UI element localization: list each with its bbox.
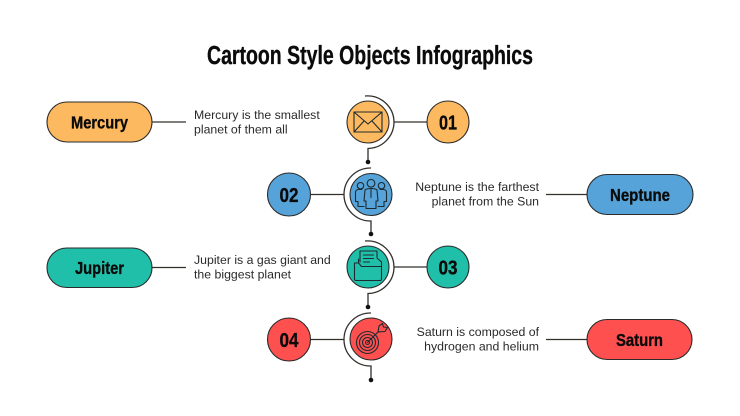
pill: Neptune: Neptune: [610, 185, 670, 205]
text: Jupiter description: the biggest planet: [194, 268, 292, 282]
number 03: [427, 246, 469, 288]
connector arc with dot: [365, 96, 394, 164]
pill: Jupiter: Jupiter: [75, 258, 124, 278]
pill: Mercury: [47, 102, 152, 142]
pill: Saturn: Saturn: [616, 330, 663, 350]
pill: Jupiter: [47, 248, 152, 288]
row 4: Saturn: [268, 313, 692, 382]
text: Mercury description: planet of them all: [194, 122, 288, 136]
icon: people: [350, 174, 392, 216]
text: Neptune description: Neptune is the farthest: [415, 180, 540, 194]
number 02: 02: [280, 184, 298, 207]
icon: envelope: [347, 101, 389, 143]
row 2: Neptune: [268, 168, 693, 236]
text: Jupiter description: Jupiter is a gas giant and: [194, 253, 331, 267]
text: Saturn description: hydrogen and helium: [424, 340, 539, 354]
icon: folder: [347, 246, 389, 288]
connector arc with dot: [344, 313, 373, 382]
icon: target with dart: [350, 318, 392, 360]
text: Neptune description: planet from the Sun: [432, 194, 539, 208]
number 01: [427, 101, 469, 143]
text: Saturn description: Saturn is composed of: [417, 325, 540, 339]
number 03: 03: [438, 256, 458, 280]
pill: Saturn: [587, 320, 692, 360]
pill: Neptune: [587, 174, 693, 214]
title: Cartoon Style Objects Infographics: [207, 42, 533, 70]
row 1: Mercury: [47, 96, 469, 164]
connector arc with dot: [344, 168, 373, 236]
connector arc with dot: [365, 241, 394, 309]
text: Mercury description: Mercury is the smallest: [194, 108, 320, 122]
number 02: [268, 173, 310, 216]
number 04: [268, 318, 310, 361]
row 3: Jupiter: [47, 241, 469, 309]
pill: Mercury: Mercury: [71, 112, 128, 132]
number 04: 04: [280, 329, 299, 352]
number 01: 01: [439, 112, 457, 134]
